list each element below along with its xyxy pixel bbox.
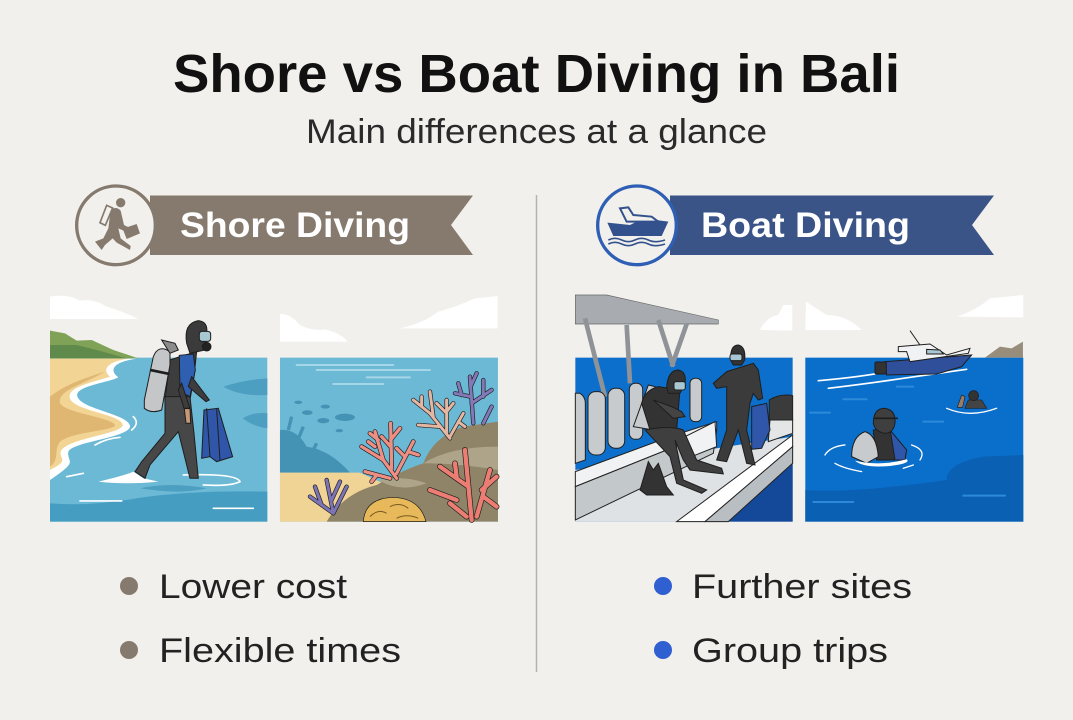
banner: shore diving: Shore Diving — [180, 206, 410, 245]
coral: pale — [413, 392, 465, 438]
icon: boat — [598, 186, 676, 265]
illustration: divers in open water — [805, 295, 1023, 522]
diver near — [852, 408, 907, 463]
diver — [135, 321, 233, 478]
panel: shore diving — [50, 186, 498, 670]
bullet list: boat: Group trips — [692, 632, 888, 670]
coral: purple bottom — [310, 480, 347, 513]
seated diver — [633, 370, 723, 493]
bullet list: boat — [654, 568, 912, 670]
standing diver — [713, 345, 770, 465]
panel: boat diving — [575, 186, 1023, 670]
coral: red — [430, 450, 497, 520]
bullet list: shore — [120, 568, 401, 670]
coral: purple top — [455, 373, 492, 423]
illustration: diver walking into the sea — [50, 296, 267, 522]
diver far — [957, 391, 987, 408]
subtitle: Main differences at a glance — [306, 113, 767, 151]
banner: boat diving: Boat Diving — [701, 206, 910, 245]
bullet list: boat: Further sites — [692, 568, 912, 606]
boat — [875, 331, 972, 375]
fins — [640, 462, 673, 495]
title: Shore vs Boat Diving in Bali — [173, 44, 900, 104]
bullet list: shore: Lower cost — [159, 568, 348, 606]
banner: shore diving — [77, 186, 473, 265]
illustration: divers on boat deck — [575, 295, 793, 522]
bullet list: shore: Flexible times — [159, 632, 401, 670]
icon: walking diver — [77, 186, 155, 265]
coral: pink — [362, 423, 418, 482]
banner: boat diving — [598, 186, 994, 265]
illustration: coral reef — [280, 296, 498, 522]
